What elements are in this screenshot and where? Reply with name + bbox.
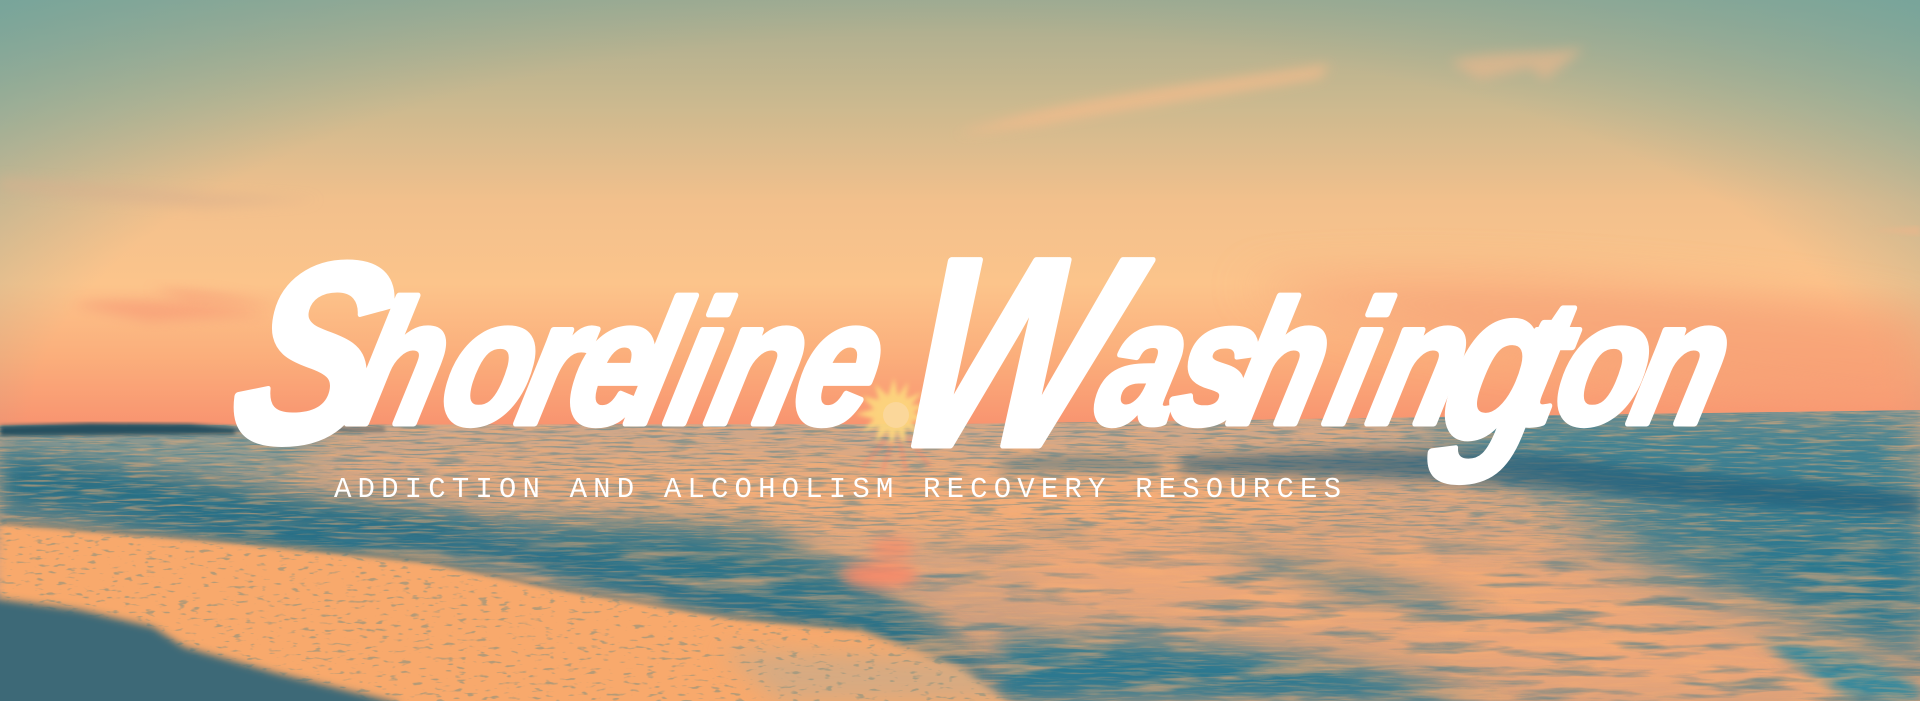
title: e	[552, 266, 679, 461]
central peach	[400, 470, 1337, 533]
title: s	[1155, 266, 1282, 461]
title: i	[1312, 266, 1403, 461]
title: g	[1422, 243, 1588, 484]
title: h	[335, 266, 470, 461]
title: W	[875, 203, 1167, 502]
sand beach	[0, 518, 1014, 701]
clouds	[0, 48, 1920, 410]
title: l	[614, 266, 704, 461]
title: t	[1495, 266, 1596, 461]
left wave	[0, 450, 560, 565]
sea	[0, 405, 1920, 701]
sun reflection	[842, 538, 918, 587]
distant land	[0, 423, 385, 436]
right dark wave	[1180, 451, 1920, 515]
title: i	[653, 266, 743, 461]
title: n	[1616, 266, 1750, 461]
dark wet sand	[0, 598, 398, 701]
title: n	[1355, 266, 1490, 461]
title: S	[210, 210, 417, 495]
title: o	[426, 266, 560, 461]
title: o	[1539, 266, 1674, 461]
right lower water	[1550, 505, 1920, 660]
left far water	[0, 425, 330, 480]
title: e	[778, 266, 904, 461]
mid-left water	[520, 520, 960, 650]
shoreline water	[0, 505, 1060, 700]
right far water	[1400, 410, 1920, 640]
title: h	[1216, 266, 1350, 461]
title: r	[504, 266, 614, 461]
shoreline edge	[0, 522, 857, 628]
icon: setting sun	[856, 378, 930, 472]
title: a	[1082, 266, 1208, 461]
title: n	[694, 266, 828, 461]
subtitle: ADDICTION AND ALCOHOLISM RECOVERY RESOURCES	[334, 473, 1341, 506]
sky background	[0, 0, 1920, 430]
water texture	[0, 410, 1920, 564]
